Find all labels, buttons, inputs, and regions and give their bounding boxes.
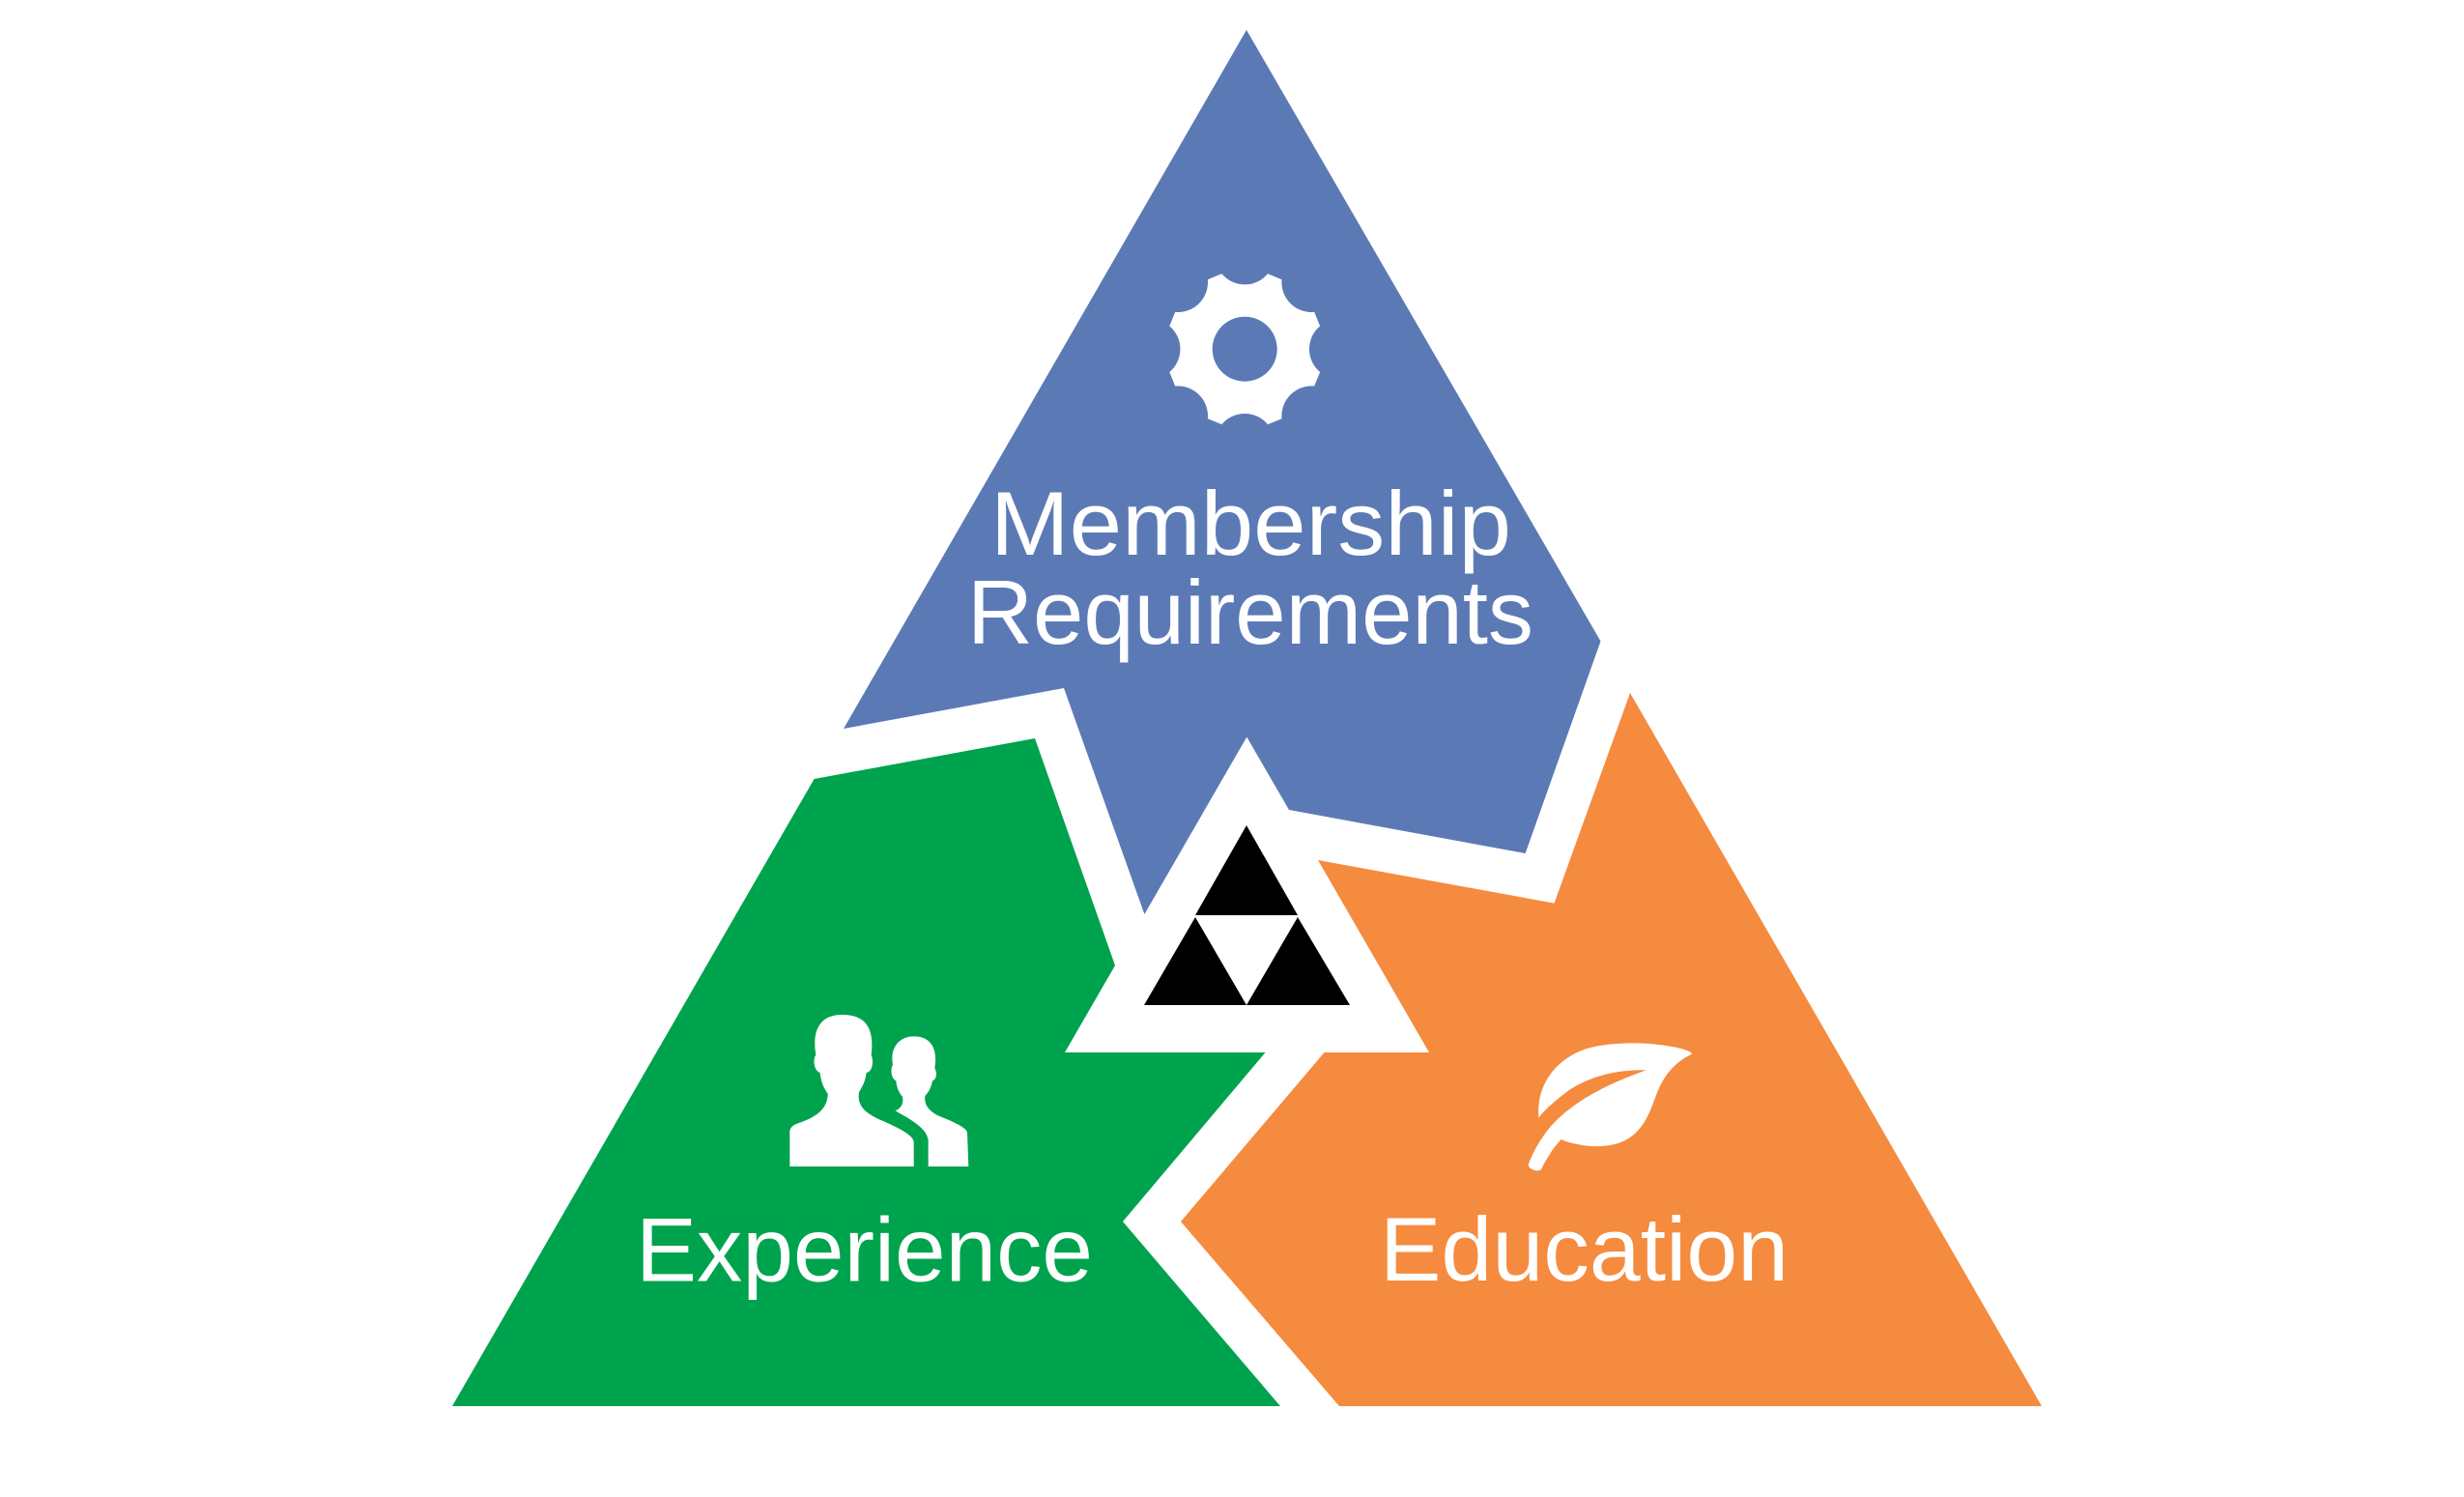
- icon: two people: [789, 1015, 968, 1166]
- heading: membership requirements: Membership: [990, 473, 1511, 574]
- panel: experience: [452, 738, 1280, 1406]
- icon: central triforce triangle: [1144, 825, 1350, 1005]
- heading: education: Education: [1380, 1198, 1789, 1300]
- heading: experience: Experience: [636, 1198, 1093, 1301]
- green segment: [452, 738, 1280, 1406]
- icon: gear: [1169, 273, 1320, 424]
- panel: education: [1181, 693, 2042, 1406]
- heading: membership requirements: [967, 473, 1533, 663]
- blue segment: [844, 30, 1600, 914]
- icon: leaf: [1529, 1043, 1692, 1170]
- heading: membership requirements: Requirements: [967, 561, 1533, 663]
- panel: membership requirements: [844, 30, 1600, 914]
- orange segment: [1181, 693, 2042, 1406]
